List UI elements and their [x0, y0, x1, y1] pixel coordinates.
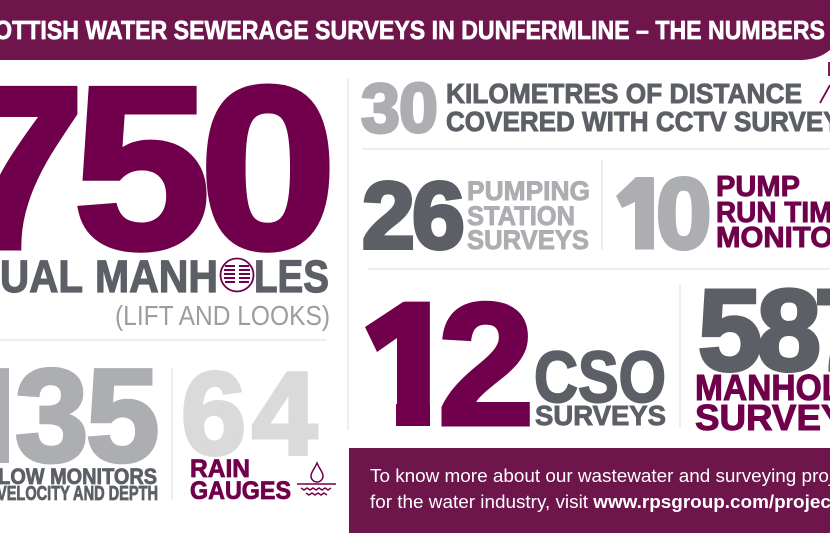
label: gauges: GAUGES	[190, 477, 291, 505]
panel: manhole surveys	[695, 267, 830, 438]
header banner	[0, 0, 830, 60]
label: pump: PUMP	[716, 171, 800, 203]
label: kilometres of distance: KILOMETRES OF DISTANCE	[446, 78, 802, 109]
footer call to action	[349, 448, 830, 533]
sublabel: lift and looks: (LIFT AND LOOKS)	[115, 300, 330, 331]
number: 26: 26	[362, 163, 465, 269]
panel: flow monitors	[0, 342, 159, 505]
label: surveys: SURVEYS	[535, 400, 666, 431]
label: pumping: PUMPING	[467, 176, 590, 206]
panel: rain gauges	[181, 348, 336, 505]
panel: pump run time monitors	[610, 158, 830, 270]
number: 1: 1	[616, 158, 672, 270]
label: surveys: SURVEYS	[467, 225, 589, 255]
label: rain: RAIN	[190, 455, 250, 483]
panel: pumping station surveys	[362, 163, 590, 269]
icon: water drop	[297, 463, 336, 495]
label: station: STATION	[467, 201, 575, 231]
number: 64: 64	[181, 348, 317, 479]
panel: cso surveys	[360, 267, 666, 462]
label: cso: CSO	[534, 338, 666, 418]
panel: cctv distance	[361, 62, 830, 147]
icon: cctv camera	[820, 62, 830, 103]
number: 30: 30	[361, 69, 438, 147]
label: manh: MANH	[95, 251, 218, 302]
number: 0: 0	[656, 158, 712, 270]
label: les: LES	[254, 251, 329, 302]
label: velocity and depth: VELOCITY AND DEPTH	[0, 482, 158, 505]
number: 1: 1	[363, 267, 460, 462]
panel: visual manholes	[0, 38, 337, 331]
number: 2: 2	[438, 267, 534, 461]
number: 35: 35	[15, 342, 159, 489]
icon: manhole cover	[220, 258, 254, 292]
